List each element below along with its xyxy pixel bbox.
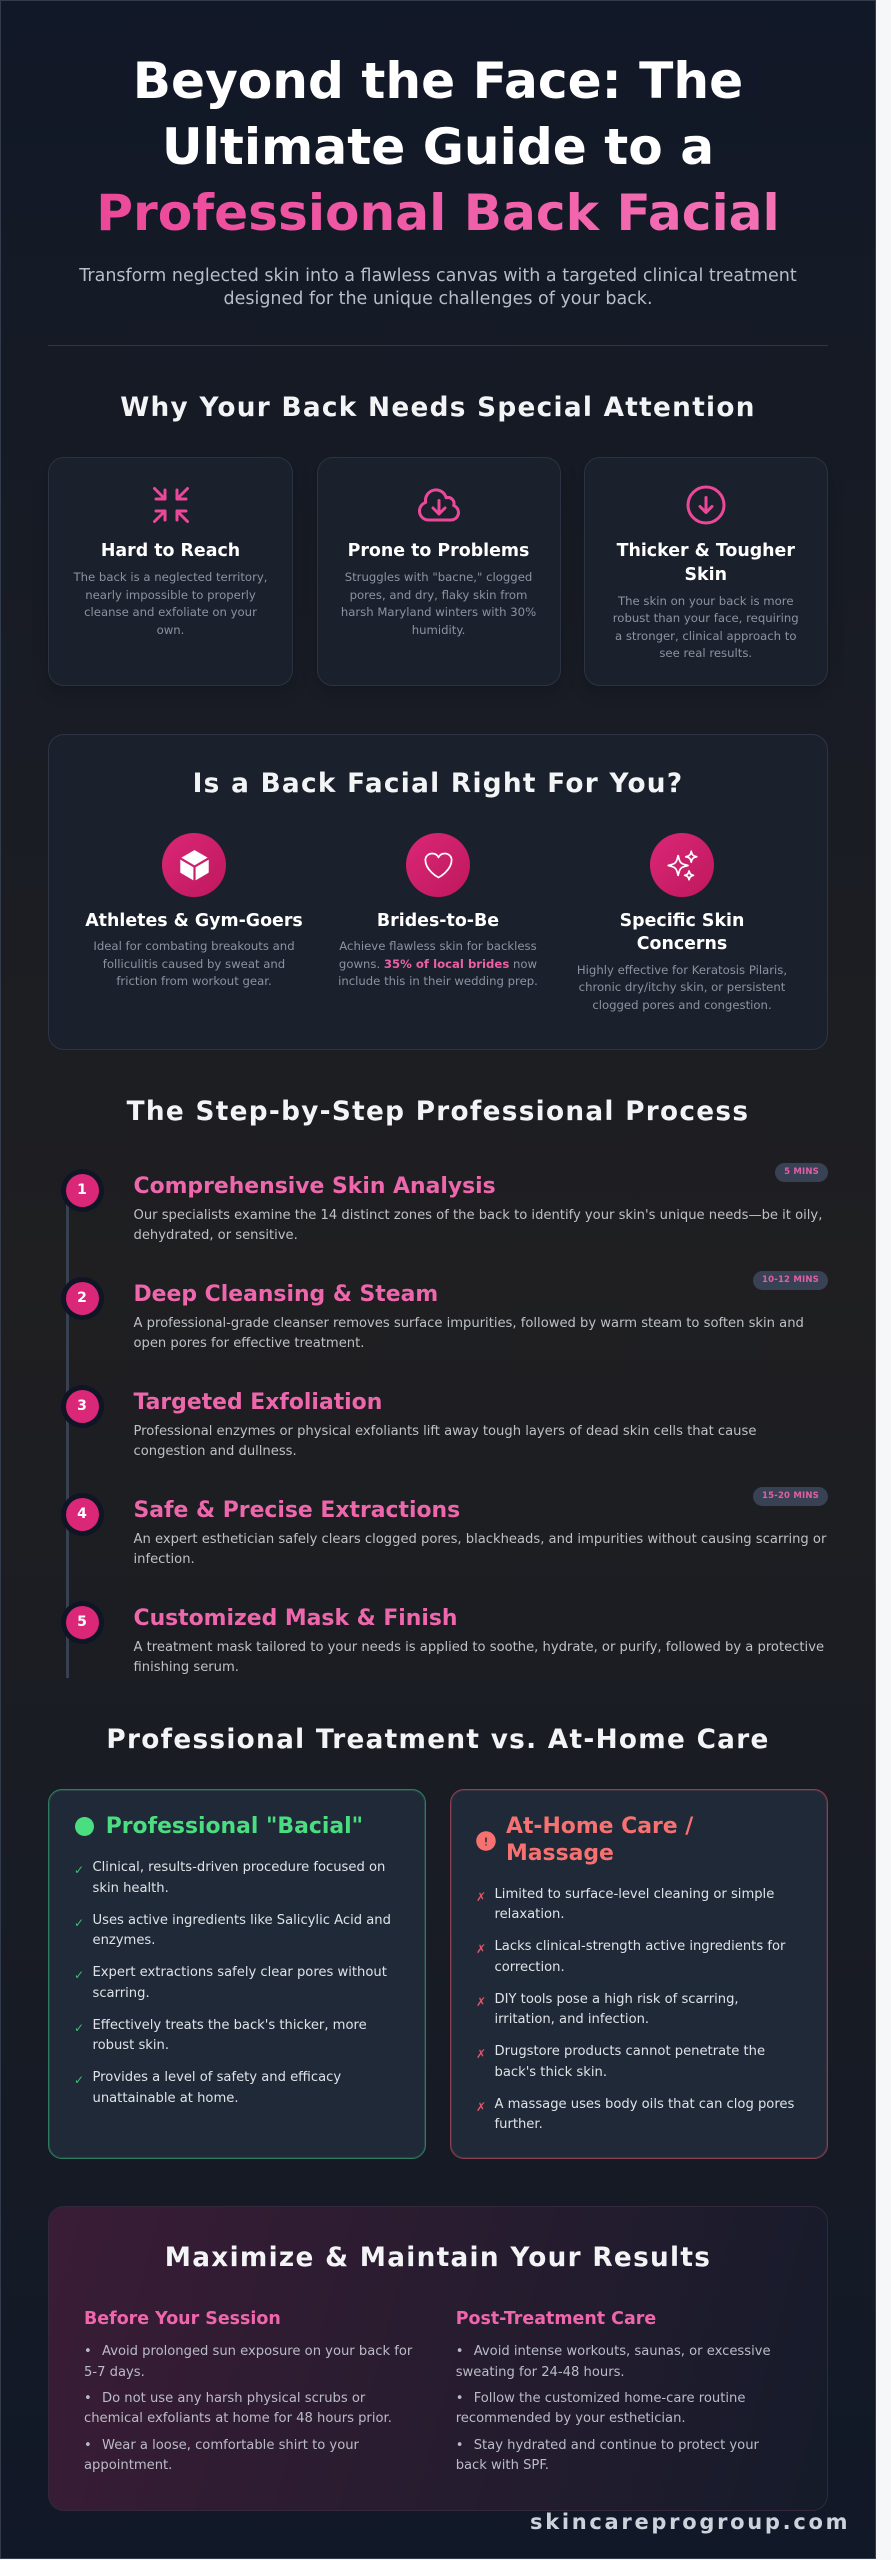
step 1: Our specialists examine the 14 distinct zones of the back to identify your skin's unique needs—be it oily, <box>134 1208 822 1223</box>
list: post-treatment care: • <box>456 2391 463 2406</box>
step 4: 4 <box>77 1506 87 1522</box>
icon: cube <box>162 833 226 897</box>
benefits list: Clinical, results-driven procedure focused on <box>92 1860 385 1875</box>
list: post-treatment care: • <box>456 2344 463 2359</box>
audience: skin concerns text: clogged pores and congestion. <box>592 998 772 1012</box>
list: post-treatment care: Stay hydrated and continue to protect your <box>474 2438 759 2453</box>
panel heading: Maximize & Maintain Your Results <box>165 2243 711 2273</box>
audience: skin concerns heading: Concerns <box>637 934 727 954</box>
panel: is a back facial right for you <box>48 734 828 1050</box>
audience: skin concerns heading <box>620 911 744 954</box>
list: post-treatment care: • <box>456 2438 463 2453</box>
benefits list: Effectively treats the back's thicker, more <box>92 2018 367 2033</box>
panel: professional bacial <box>48 1789 426 2159</box>
list: before your session: Wear a loose, comfortable shirt to your <box>102 2438 359 2453</box>
drawbacks list: relaxation. <box>494 1907 564 1922</box>
step 1: 1 <box>77 1182 87 1198</box>
icon: arrow down circle <box>686 486 726 524</box>
step 3: Targeted Exfoliation <box>134 1390 382 1415</box>
benefits list: ✓ <box>74 1863 84 1877</box>
drawbacks list: Lacks clinical-strength active ingredients for <box>494 1939 785 1954</box>
heading: step-by-step process: The Step-by-Step Professional Process <box>127 1097 749 1127</box>
benefits list: ✓ <box>74 2021 84 2035</box>
step 1 <box>61 1163 828 1243</box>
title: Beyond the Face: The <box>133 51 743 110</box>
heading: why your back needs special attention: Why Your Back Needs Special Attention <box>120 393 756 423</box>
drawbacks list: Limited to surface-level cleaning or simple <box>494 1887 774 1902</box>
card text: a stronger, clinical approach to <box>615 629 797 643</box>
card text: pores, and dry, flaky skin from <box>350 588 527 602</box>
drawbacks list: correction. <box>494 1960 565 1975</box>
icon: sparkles <box>650 833 714 897</box>
audience: athletes text: friction from workout gear. <box>116 974 272 988</box>
audience: brides text: Achieve flawless skin for backless <box>339 939 537 953</box>
step 4: Safe & Precise Extractions <box>134 1498 460 1523</box>
audience: skin concerns text <box>577 963 787 1012</box>
list: before your session: • <box>84 2438 92 2453</box>
icon: exclamation <box>476 1831 496 1851</box>
subtitle: Transform neglected skin into a flawless canvas with a targeted clinical treatment <box>79 266 797 286</box>
panel: at-home care <box>450 1789 828 2159</box>
panel heading: Massage <box>506 1841 614 1866</box>
benefits list: Provides a level of safety and efficacy <box>92 2070 341 2085</box>
step 3: Professional enzymes or physical exfoliants lift away tough layers of dead skin cells that cause <box>134 1424 756 1439</box>
benefits list: robust skin. <box>92 2038 169 2053</box>
drawbacks list: ✗ <box>476 1890 486 1904</box>
card text: The back is a neglected territory, <box>74 570 268 584</box>
audience: athletes heading: Athletes & Gym-Goers <box>85 911 303 931</box>
card heading: Skin <box>685 565 727 585</box>
time badge: 5 MINS <box>784 1167 819 1177</box>
benefits list: enzymes. <box>92 1933 155 1948</box>
time badge <box>753 1271 828 1290</box>
list: post-treatment care: Avoid intense workouts, saunas, or excessive <box>474 2344 771 2359</box>
icon: green dot <box>75 1817 94 1836</box>
time badge <box>775 1163 828 1182</box>
card text: own. <box>157 623 184 637</box>
step 2: open pores for effective treatment. <box>134 1336 364 1351</box>
step 4: infection. <box>134 1552 195 1567</box>
audience: skin concerns heading: Specific Skin <box>620 911 744 931</box>
step 5 <box>61 1601 824 1675</box>
audience: skin concerns text: Highly effective for Keratosis Pilaris, <box>577 963 787 977</box>
timeline: process steps <box>61 1163 828 1678</box>
drawbacks list: ✗ <box>476 2100 486 2114</box>
panel: hard to reach <box>48 457 293 686</box>
step 3: 3 <box>77 1398 87 1414</box>
step 5: 5 <box>77 1614 87 1630</box>
list: before your session: • <box>84 2344 92 2359</box>
list: post-treatment care: back with SPF. <box>456 2458 549 2473</box>
footer: website: skincareprogroup.com <box>530 2510 850 2534</box>
title <box>96 51 780 242</box>
benefits list: Expert extractions safely clear pores without <box>92 1965 387 1980</box>
card text <box>613 594 799 660</box>
icon: heart <box>406 833 470 897</box>
card heading <box>616 541 795 585</box>
list: before your session <box>84 2344 412 2473</box>
drawbacks list: ✗ <box>476 1995 486 2009</box>
drawbacks list: ✗ <box>476 1942 486 1956</box>
audience: athletes text: folliculitis caused by sweat and <box>103 957 285 971</box>
title: Ultimate Guide to a <box>162 117 714 176</box>
drawbacks list: Drugstore products cannot penetrate the <box>494 2044 765 2059</box>
audience: brides text: include this in their wedding prep. <box>338 974 538 988</box>
title: Professional Back Facial <box>96 183 780 242</box>
list: before your session: chemical exfoliants at home for 48 hours prior. <box>84 2411 392 2426</box>
column heading: before: Before Your Session <box>84 2309 281 2329</box>
card text: see real results. <box>659 646 752 660</box>
benefits list: ✓ <box>74 2073 84 2087</box>
step 1: dehydrated, or sensitive. <box>134 1228 298 1243</box>
step 5: A treatment mask tailored to your needs is applied to soothe, hydrate, or purify, followed by a protective <box>134 1640 824 1655</box>
list: post-treatment care: Follow the customized home-care routine <box>474 2391 745 2406</box>
benefits list: Uses active ingredients like Salicylic Acid and <box>92 1913 391 1928</box>
benefits list: skin health. <box>92 1881 169 1896</box>
card text: humidity. <box>412 623 465 637</box>
card text: Struggles with "bacne," clogged <box>345 570 532 584</box>
icon: arrows pointing in <box>152 486 190 524</box>
card text: The skin on your back is more <box>618 594 794 608</box>
benefits list: ✓ <box>74 1968 84 1982</box>
panel heading: At-Home Care / <box>506 1814 693 1839</box>
card text: harsh Maryland winters with 30% <box>341 605 536 619</box>
step 2: Deep Cleansing & Steam <box>134 1282 438 1307</box>
subtitle <box>79 266 797 308</box>
audience: brides heading: Brides-to-Be <box>377 911 499 931</box>
step 4 <box>61 1487 828 1567</box>
step 1: Comprehensive Skin Analysis <box>134 1174 496 1199</box>
subtitle: designed for the unique challenges of your back. <box>223 288 653 308</box>
time badge: 10-12 MINS <box>762 1275 819 1285</box>
list: post-treatment care <box>456 2344 771 2473</box>
card heading: Hard to Reach <box>101 541 240 561</box>
panel heading <box>506 1814 694 1866</box>
list: before your session: Avoid prolonged sun exposure on your back for <box>102 2344 412 2359</box>
card text <box>74 570 268 637</box>
list: post-treatment care: sweating for 24-48 hours. <box>456 2365 625 2380</box>
step 2: 2 <box>77 1290 87 1306</box>
list: before your session: Do not use any harsh physical scrubs or <box>102 2391 365 2406</box>
audience: brides text <box>338 939 538 988</box>
list: before your session: • <box>84 2391 92 2406</box>
panel heading: Professional "Bacial" <box>106 1814 363 1839</box>
list: before your session: 5-7 days. <box>84 2365 145 2380</box>
column heading: post-treatment: Post-Treatment Care <box>456 2309 656 2329</box>
card text: nearly impossible to properly <box>85 588 256 602</box>
audience: skin concerns text: chronic dry/itchy skin, or persistent <box>579 980 785 994</box>
drawbacks list: further. <box>494 2117 543 2132</box>
card heading: Prone to Problems <box>348 541 529 561</box>
panel heading: Is a Back Facial Right For You? <box>193 769 683 799</box>
time badge <box>753 1487 828 1506</box>
step 2: A professional-grade cleanser removes surface impurities, followed by warm steam to soften skin and <box>134 1316 804 1331</box>
list: post-treatment care: recommended by your esthetician. <box>456 2411 686 2426</box>
heading: professional vs at-home: Professional Treatment vs. At-Home Care <box>106 1725 770 1755</box>
step 3 <box>61 1385 756 1459</box>
step 4: An expert esthetician safely clears clogged pores, blackheads, and impurities without causing scarring or <box>134 1532 826 1547</box>
benefits list: unattainable at home. <box>92 2091 238 2106</box>
card text: robust than your face, requiring <box>613 611 799 625</box>
list: before your session: appointment. <box>84 2458 172 2473</box>
panel: thicker and tougher skin <box>584 457 828 686</box>
step 5: finishing serum. <box>134 1660 239 1675</box>
audience: athletes text <box>93 939 295 988</box>
drawbacks list: A massage uses body oils that can clog pores <box>494 2097 794 2112</box>
time badge: 15-20 MINS <box>762 1491 819 1501</box>
drawbacks list: irritation, and infection. <box>494 2012 649 2027</box>
step 2 <box>61 1271 828 1351</box>
panel: maximize and maintain results <box>48 2206 828 2511</box>
panel: prone to problems <box>316 457 560 686</box>
step 3: congestion and dullness. <box>134 1444 297 1459</box>
benefits list: scarring. <box>92 1986 150 2001</box>
drawbacks list: back's thick skin. <box>494 2065 607 2080</box>
audience: brides text: gowns. 35% of local brides now <box>339 957 537 971</box>
step 5: Customized Mask & Finish <box>134 1606 458 1631</box>
benefits list: ✓ <box>74 1916 84 1930</box>
card heading: Thicker & Tougher <box>617 541 795 561</box>
icon: cloud arrow down <box>418 488 460 522</box>
drawbacks list: ✗ <box>476 2047 486 2061</box>
audience: athletes text: Ideal for combating breakouts and <box>93 939 295 953</box>
benefits list <box>74 1860 391 2106</box>
card text: cleanse and exfoliate on your <box>84 605 257 619</box>
drawbacks list: DIY tools pose a high risk of scarring, <box>494 1992 739 2007</box>
card text <box>341 570 536 637</box>
drawbacks list <box>476 1887 794 2132</box>
